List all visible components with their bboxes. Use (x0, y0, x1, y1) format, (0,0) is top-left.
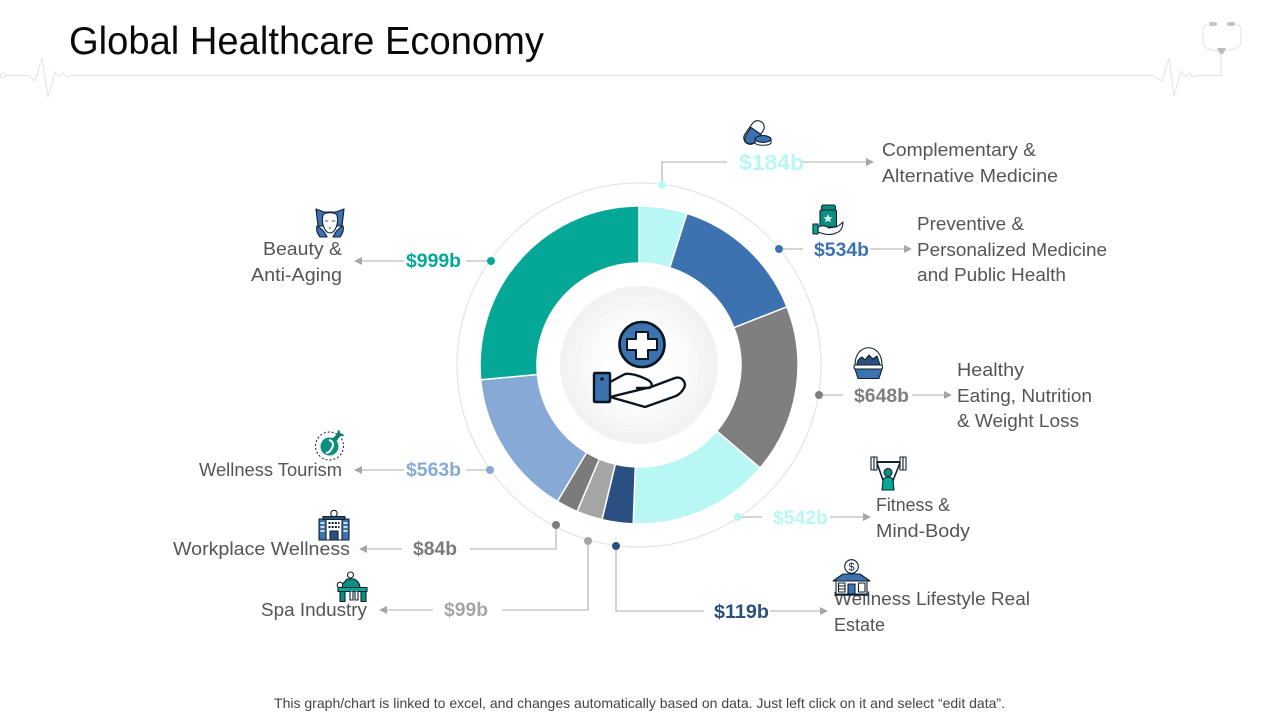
callout: beauty and anti-aging: Beauty & (263, 239, 342, 259)
callout: beauty and anti-aging: $999b (406, 251, 461, 272)
slice: preventive medicine (670, 213, 787, 328)
donut chart (480, 206, 798, 524)
callout: beauty and anti-aging: Anti-Aging (251, 265, 342, 285)
callout: healthy eating: & Weight Loss (957, 411, 1079, 431)
callout: complementary and alternative medicine (658, 118, 1058, 189)
icon: hospital building (319, 510, 349, 540)
icon: globe with plane (316, 430, 344, 460)
callout: wellness lifestyle real estate: Wellness Lifestyle Real (834, 589, 1030, 609)
footnote: This graph/chart is linked to excel, and changes automatically based on data. Just left click on it and select “edit data”. (274, 695, 1005, 711)
callout: preventive and personalized medicine: $534b (814, 240, 869, 261)
icon: hand holding medical cross (594, 322, 685, 407)
slice: tourism (481, 374, 587, 501)
slice: beauty (480, 206, 639, 380)
callout: spa industry (261, 537, 592, 621)
icon: weightlifter (871, 457, 906, 490)
callout: healthy eating: $648b (854, 386, 909, 407)
callout: wellness tourism: $563b (406, 460, 461, 481)
callout: wellness tourism (199, 430, 494, 481)
slice: healthy eating (717, 307, 798, 468)
center medallion (560, 286, 718, 444)
callout: wellness lifestyle real estate: $119b (714, 602, 769, 623)
slice: complementary medicine (639, 206, 687, 268)
callout: wellness lifestyle real estate (612, 542, 1030, 635)
icon: pills (741, 118, 771, 147)
title: Global Healthcare Economy (69, 20, 544, 63)
outer ring (457, 183, 821, 547)
callout: complementary and alternative medicine: Complementary & (882, 140, 1036, 160)
callout: complementary and alternative medicine: $184b (739, 150, 804, 175)
header line with heartbeat and stethoscope (0, 22, 1241, 97)
callout: wellness lifestyle real estate: Estate (834, 615, 885, 635)
callout: spa industry: Spa Industry (261, 600, 367, 620)
callout: fitness and mind-body: Mind-Body (876, 521, 970, 541)
callout: healthy eating: Eating, Nutrition (957, 386, 1092, 406)
icon: house with dollar: $ (848, 562, 855, 574)
slice: real estate (602, 464, 635, 524)
callout: fitness and mind-body (734, 457, 970, 541)
callout: preventive and personalized medicine (775, 205, 1107, 285)
callout: fitness and mind-body: $542b (773, 508, 828, 529)
callout: healthy eating (815, 348, 1092, 431)
icon: food basket (854, 348, 882, 378)
icon: house with dollar (833, 560, 870, 595)
callout: fitness and mind-body: Fitness & (876, 495, 950, 515)
icon: massage table (337, 572, 367, 602)
callout: beauty and anti-aging (251, 209, 495, 285)
callout: wellness tourism: Wellness Tourism (199, 460, 342, 480)
slice: workplace (557, 452, 599, 512)
callout: preventive and personalized medicine: and Public Health (917, 265, 1066, 285)
callout: healthy eating: Healthy (957, 360, 1024, 380)
icon: woman's face with hands (316, 209, 344, 237)
callout: workplace wellness: $84b (413, 539, 457, 560)
callout: spa industry: $99b (444, 600, 488, 621)
slice: fitness (633, 431, 760, 524)
callout: preventive and personalized medicine: Personalized Medicine (917, 240, 1107, 260)
slice: spa (577, 459, 615, 520)
callout: workplace wellness (173, 510, 560, 560)
callout: workplace wellness: Workplace Wellness (173, 539, 350, 559)
callout: preventive and personalized medicine: Preventive & (917, 214, 1024, 234)
icon: hand with medicine bottle (813, 205, 843, 235)
callout: complementary and alternative medicine: Alternative Medicine (882, 166, 1058, 186)
